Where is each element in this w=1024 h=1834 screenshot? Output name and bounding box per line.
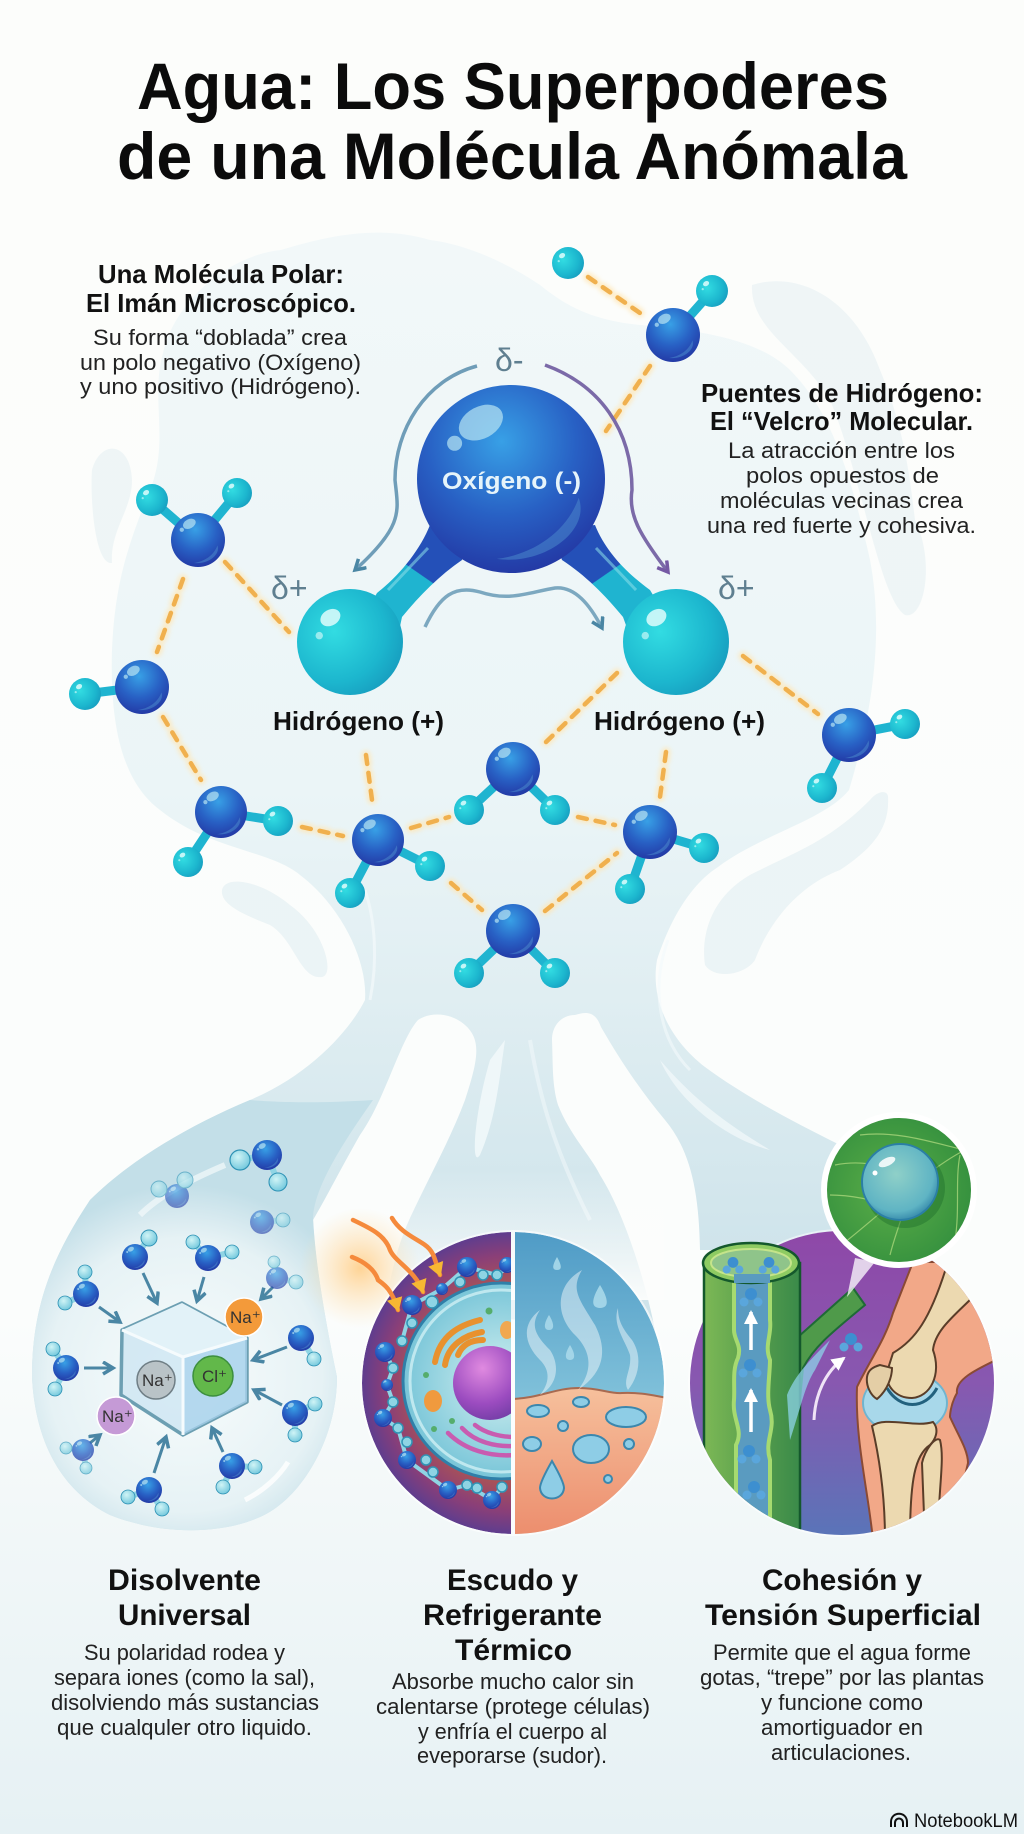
hydrogen labels xyxy=(273,706,765,736)
falling droplets xyxy=(545,1257,607,1360)
nucleus xyxy=(453,1346,511,1420)
ion: Na purple xyxy=(97,1397,135,1435)
panel: universal solvent drop xyxy=(32,1100,373,1530)
column: thermal shield: y enfría el cuerpo al xyxy=(418,1719,607,1744)
molecule B xyxy=(335,814,445,908)
column: universal solvent: separa iones (como la sal), xyxy=(54,1665,315,1690)
text block: hydrogen bonds xyxy=(701,378,983,538)
ion: Na orange xyxy=(225,1298,263,1336)
delta labels: δ- xyxy=(495,342,523,378)
stem rising arrows xyxy=(749,1312,753,1350)
right hydrogen atom xyxy=(623,589,729,695)
polarity arrow left xyxy=(355,366,477,570)
delta labels: δ+ xyxy=(718,570,754,606)
column: thermal shield: eveporarse (sudor). xyxy=(417,1743,607,1768)
text block: hydrogen bonds: La atracción entre los xyxy=(728,438,955,463)
surrounding water molecules xyxy=(46,1140,322,1516)
text block: polar molecule: El Imán Microscópico. xyxy=(86,288,356,318)
knee joint xyxy=(857,1262,1000,1540)
molecule D xyxy=(615,805,719,904)
delta labels xyxy=(271,342,754,606)
column: universal solvent: Disolvente xyxy=(108,1564,261,1597)
panel: thermal shield circle xyxy=(352,1218,668,1540)
plant branch xyxy=(775,1288,865,1400)
ion: Na purple: Na⁺ xyxy=(102,1407,133,1426)
leaf inset xyxy=(821,1112,977,1268)
hydrogen labels: Hidrógeno (+) xyxy=(273,706,444,736)
column: cohesion xyxy=(700,1564,984,1765)
column: thermal shield: Térmico xyxy=(455,1634,572,1667)
evaporating skin half xyxy=(515,1232,664,1534)
column: thermal shield: calentarse (protege células) xyxy=(376,1694,650,1719)
ion: Cl green: Cl⁺ xyxy=(202,1367,227,1386)
stem opening xyxy=(703,1243,799,1283)
panel: cohesion circle xyxy=(688,1112,1000,1543)
title: Agua: Los Superpoderes xyxy=(137,49,889,123)
delta labels: δ+ xyxy=(271,570,308,606)
text block: hydrogen bonds: polos opuestos de xyxy=(746,463,939,488)
water body flowing into three streams xyxy=(32,233,926,1530)
ion: Na orange: Na⁺ xyxy=(230,1308,261,1327)
endoplasmic reticulum xyxy=(448,1425,515,1455)
text block: polar molecule: y uno positivo (Hidrógeno). xyxy=(80,374,361,399)
droplet cluster xyxy=(840,1333,862,1352)
heat glow xyxy=(300,1208,420,1328)
left hydrogen atom xyxy=(297,589,403,695)
molecule right xyxy=(807,708,920,803)
column: universal solvent: disolviendo más sustancias xyxy=(51,1690,319,1715)
oxygen atom xyxy=(417,385,605,573)
ion: Cl green xyxy=(193,1356,233,1396)
title xyxy=(117,49,908,193)
text block: hydrogen bonds: Puentes de Hidrógeno: xyxy=(701,378,983,408)
molecule left upper xyxy=(136,478,252,567)
network of small water molecules xyxy=(69,247,920,988)
cell half xyxy=(362,1232,511,1534)
heat waves xyxy=(352,1218,440,1310)
column: universal solvent xyxy=(51,1564,319,1740)
water drop on leaf xyxy=(865,1148,945,1228)
ion: Na grey: Na⁺ xyxy=(142,1371,173,1390)
polarity arrow right xyxy=(545,365,668,572)
column: cohesion: Cohesión y xyxy=(762,1564,922,1597)
text block: hydrogen bonds: moléculas vecinas crea xyxy=(720,488,964,513)
text block: polar molecule xyxy=(80,259,361,399)
plant stem xyxy=(704,1263,800,1543)
molecule A xyxy=(173,786,293,877)
sweat drops xyxy=(523,1397,646,1498)
footer logo: NotebookLM xyxy=(914,1811,1018,1832)
text block: hydrogen bonds: El “Velcro” Molecular. xyxy=(710,406,973,436)
column: thermal shield xyxy=(376,1564,650,1768)
molecule E xyxy=(454,904,570,988)
column: cohesion: gotas, “trepe” por las plantas xyxy=(700,1665,984,1690)
hydrogen labels: Hidrógeno (+) xyxy=(594,706,765,736)
oxygen label: Oxígeno (-) xyxy=(442,468,581,495)
column: thermal shield: Absorbe mucho calor sin xyxy=(392,1669,634,1694)
steam xyxy=(527,1270,638,1395)
title: de una Molécula Anómala xyxy=(117,119,908,193)
text block: hydrogen bonds: una red fuerte y cohesiva. xyxy=(707,513,976,538)
central water molecule xyxy=(297,385,729,695)
hydrogen bond dashes xyxy=(157,277,818,911)
column: universal solvent: Su polaridad rodea y xyxy=(84,1640,286,1665)
text block: polar molecule: Una Molécula Polar: xyxy=(98,259,344,289)
curved white arrow xyxy=(814,1358,844,1420)
ion: Na grey xyxy=(137,1361,175,1399)
column: thermal shield: Escudo y xyxy=(447,1564,578,1597)
solvation arrows xyxy=(84,1273,287,1473)
column: cohesion: Tensión Superficial xyxy=(705,1599,981,1632)
column: cohesion: articulaciones. xyxy=(771,1740,911,1765)
connector to leaf inset xyxy=(847,1258,875,1297)
column: cohesion: y funcione como xyxy=(761,1690,923,1715)
column: cohesion: amortiguador en xyxy=(761,1715,923,1740)
column: universal solvent: Universal xyxy=(118,1599,251,1632)
column: cohesion: Permite que el agua forme xyxy=(713,1640,971,1665)
molecule C xyxy=(454,742,570,825)
text block: polar molecule: un polo negativo (Oxígeno) xyxy=(80,350,361,375)
molecule top right xyxy=(646,275,728,362)
lone hydrogen xyxy=(552,247,584,279)
text block: polar molecule: Su forma “doblada” crea xyxy=(93,325,348,350)
column: thermal shield: Refrigerante xyxy=(423,1599,602,1632)
arrow between hydrogens xyxy=(425,588,602,628)
column: universal solvent: que cualquler otro liquido. xyxy=(57,1715,312,1740)
golgi xyxy=(435,1320,483,1365)
membrane water molecules xyxy=(374,1257,515,1509)
molecule left middle xyxy=(69,660,169,714)
salt crystal cube xyxy=(121,1303,247,1435)
